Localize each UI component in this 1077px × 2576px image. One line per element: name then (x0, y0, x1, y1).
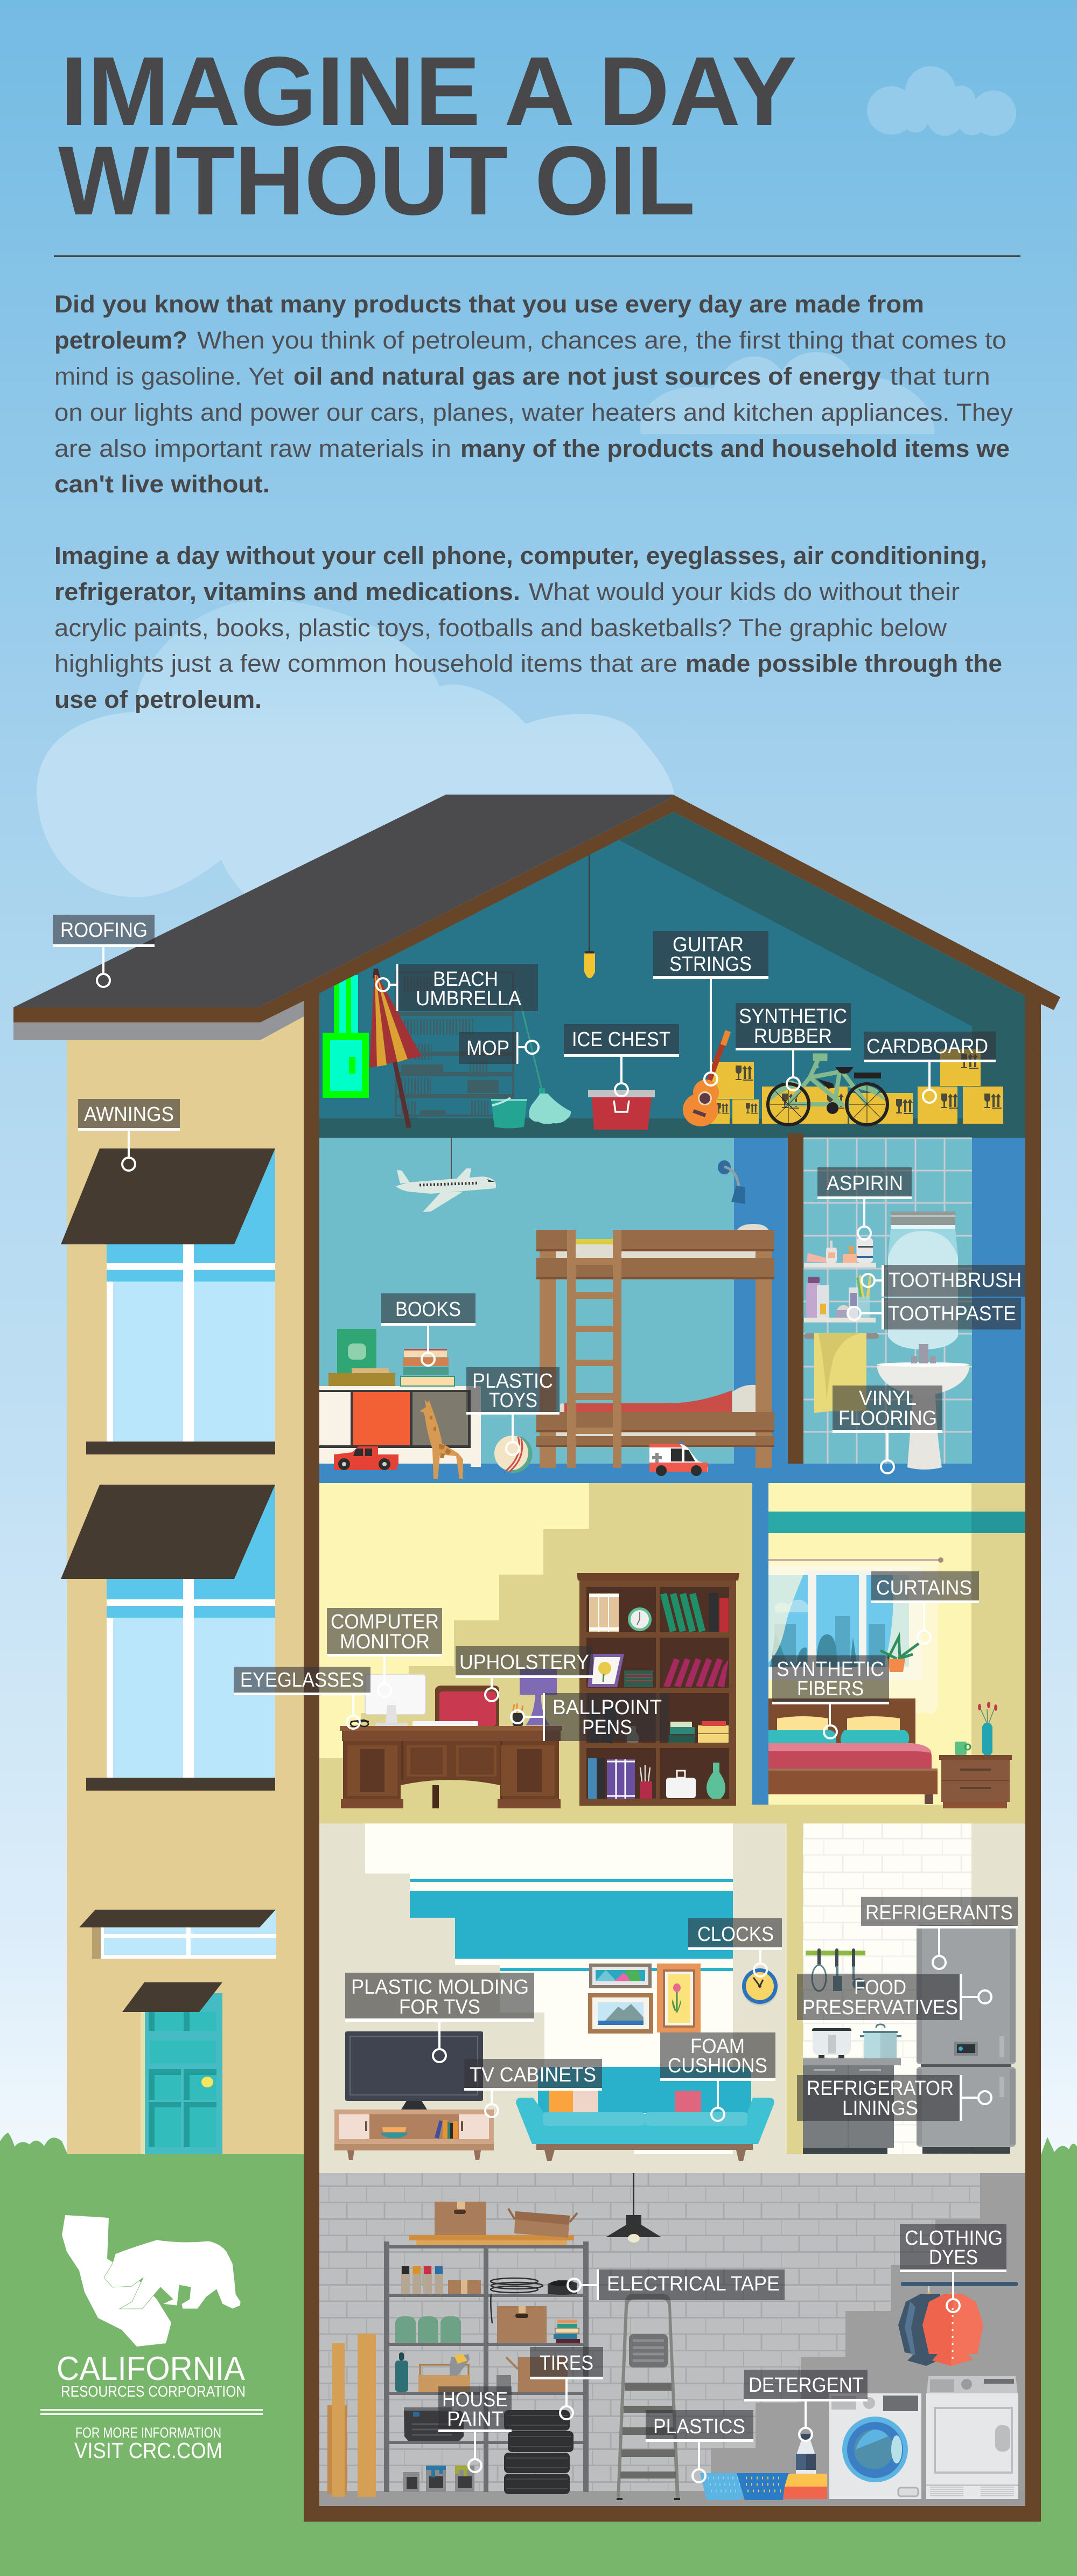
icon: cardboard boxes (710, 1049, 1003, 1124)
icon: wire coil (491, 2278, 543, 2323)
icon: stacked books and folder (328, 1329, 454, 1386)
text block: intro paragraph 1: petroleum? (54, 326, 187, 354)
panel: kitchen (787, 1823, 1025, 2173)
label: toothpaste (848, 1298, 1021, 1329)
label: synthetic rubber: SYNTHETIC (739, 1005, 847, 1028)
label: guitar strings: STRINGS (669, 953, 752, 976)
icon: beach umbrella (369, 969, 422, 1128)
label: clocks: CLOCKS (697, 1923, 774, 1946)
label: vinyl flooring: FLOORING (838, 1407, 937, 1430)
label: clothing dyes (900, 2224, 1006, 2312)
teal wall band (768, 1512, 1025, 1533)
text block: intro paragraph 2: Imagine a day without your cell phone, computer, eyeglasses, air conditioning, (54, 542, 987, 569)
label: guitar strings: GUITAR (673, 934, 744, 956)
label: eyeglasses: EYEGLASSES (240, 1669, 364, 1691)
blue wall band (410, 1879, 733, 1971)
label: eyeglasses (234, 1667, 370, 1729)
label: clothing dyes: DYES (929, 2246, 978, 2269)
text block: intro paragraph 2: highlights just a few common household items that are (54, 650, 677, 677)
title: WITHOUT OIL (58, 126, 695, 235)
transom window with awning (79, 1910, 276, 1959)
text block: intro paragraph 1: that turn (890, 363, 990, 390)
label: cardboard (864, 1032, 996, 1103)
label: foam cushions: FOAM (690, 2035, 745, 2058)
icon: paint cans (403, 2466, 474, 2492)
label: clothing dyes: CLOTHING (905, 2227, 1003, 2250)
label: house paint (438, 2386, 512, 2472)
icon: toy airplane (396, 1138, 496, 1212)
icon: dark toolbox (404, 2407, 464, 2441)
label: computer monitor (327, 1608, 442, 1697)
icon: wall lamp (718, 1160, 745, 1204)
text block: intro paragraph 2: acrylic paints, books, plastic toys, footballs and basketballs? The graphic below (54, 614, 947, 642)
icon: counter and cabinets (803, 2058, 901, 2154)
label: toothbrush (862, 1265, 1025, 1297)
label: house paint: PAINT (447, 2408, 503, 2431)
text block: intro paragraph 2 (54, 542, 1002, 713)
label: mop (459, 1032, 538, 1064)
icon: boards and boxes on top shelf (409, 2202, 577, 2245)
text block: intro paragraph 1: When you think of petroleum, chances are, the first thing that comes to (197, 326, 1006, 354)
label: plastic toys: PLASTIC (472, 1370, 553, 1393)
text block: intro paragraph 1: mind is gasoline. Yet (54, 363, 284, 390)
label: synthetic rubber (736, 1003, 851, 1090)
label: plastic molding for TVs: PLASTIC MOLDING (351, 1976, 529, 1999)
title: IMAGINE A DAY (60, 36, 797, 146)
label: electrical tape (568, 2269, 785, 2300)
label: toothpaste: TOOTHPASTE (888, 1303, 1016, 1325)
label: books (381, 1293, 475, 1366)
text block: intro paragraph 1: can't live without. (54, 470, 270, 498)
label: upholstery: UPHOLSTERY (459, 1651, 589, 1674)
bookshelf silhouette (395, 971, 514, 1117)
icon: stack of tires (504, 2410, 574, 2494)
icon: laundry baskets (700, 2473, 790, 2500)
label: TV cabinets (464, 2059, 602, 2117)
text block: intro paragraph 1: on our lights and power our cars, planes, water heaters and kitchen appliances. They (54, 399, 1013, 426)
icon: metal shelving (384, 2241, 589, 2492)
icon: picture frames (588, 1964, 701, 2034)
panel: bedroom (752, 1483, 1025, 1823)
label: ice chest (564, 1024, 679, 1096)
label: refrigerants (861, 1897, 1018, 1969)
icon: spray cans and small box (401, 2266, 481, 2294)
title (58, 36, 797, 235)
icon: toy giraffe (419, 1400, 463, 1479)
logo: California Resources Corporation (40, 2215, 263, 2463)
text block: intro paragraph 2: made possible through the (686, 650, 1002, 677)
label: detergent (744, 2370, 868, 2441)
cloud: behind text (640, 352, 934, 434)
cloud: top right (867, 66, 1016, 136)
annex wall (67, 1015, 304, 2154)
icon: hanging light bulb (584, 854, 595, 978)
icon: glass jars (395, 2316, 461, 2343)
icon: cardboard box with books (497, 2306, 580, 2343)
icon: utensil rail (806, 1948, 865, 1991)
icon: nightstand with vase and mug (939, 1702, 1012, 1808)
label: aspirin: ASPIRIN (827, 1172, 903, 1195)
icon: clothes on rail (898, 2282, 1018, 2366)
label: guitar strings (653, 931, 768, 1085)
icon: lumber planks (327, 2334, 376, 2497)
label: vinyl flooring (833, 1386, 942, 1473)
icon: mirror (888, 1212, 958, 1349)
icon: thermos, toolbox and can (395, 2352, 568, 2392)
icon: pen cup (513, 1703, 523, 1726)
lower window with awning (61, 1485, 275, 1791)
label: tires: TIRES (540, 2352, 593, 2375)
ground and grass (0, 2133, 1077, 2576)
label: refrigerator linings: LININGS (842, 2097, 918, 2120)
label: toothbrush: TOOTHBRUSH (889, 1269, 1022, 1292)
icon: television (345, 2031, 483, 2109)
icon: washing machine (829, 2393, 921, 2499)
logo: California Resources Corporation: VISIT CRC.COM (74, 2438, 222, 2463)
label: tires (530, 2347, 603, 2419)
text block: intro paragraph 2: refrigerator, vitamins and medications. (54, 578, 520, 605)
label: refrigerator linings: REFRIGERATOR (807, 2077, 954, 2100)
label: food preservatives (797, 1974, 991, 2020)
label: plastics (646, 2410, 753, 2482)
text block: intro paragraph 1: are also important raw materials in (54, 435, 451, 462)
white stepped wall (365, 1823, 733, 2154)
label: roofing: ROOFING (60, 919, 148, 942)
icon: ice chest (588, 1090, 655, 1130)
label: refrigerator linings (797, 2075, 991, 2121)
label: curtains: CURTAINS (876, 1577, 972, 1599)
label: plastic molding for TVs: FOR TVS (399, 1996, 480, 2018)
icon: bookcase (577, 1573, 739, 1806)
panel: kids bedroom (319, 1138, 1025, 1483)
icon: neon electrical box (323, 975, 369, 1098)
icon: step ladder (617, 2294, 680, 2500)
logo: California Resources Corporation: CALIFORNIA (57, 2350, 246, 2387)
icon: computer monitor (365, 1674, 478, 1726)
icon: dryer (926, 2376, 1018, 2499)
label: plastic molding for TVs (345, 1973, 534, 2062)
label: awnings: AWNINGS (84, 1103, 174, 1126)
label: electrical tape: ELECTRICAL TAPE (607, 2273, 780, 2295)
label: roofing (53, 915, 155, 987)
icon: refrigerator (917, 1925, 1016, 2154)
label: awnings (78, 1099, 180, 1171)
icon: hanging lamp (606, 2173, 661, 2243)
icon: desk (340, 1726, 562, 1808)
panel: garage (319, 2173, 1025, 2506)
panel: living room (319, 1823, 787, 2173)
icon: detergent bottle (796, 2434, 816, 2474)
icon: wall clock (742, 1968, 778, 2006)
label: house paint: HOUSE (442, 2389, 508, 2411)
label: beach umbrella: BEACH (433, 968, 498, 991)
label: foam cushions: CUSHIONS (668, 2055, 767, 2077)
icon: bathroom shelves and toiletries (804, 1238, 876, 1322)
roof (13, 795, 1060, 1040)
text block: intro paragraph 1: oil and natural gas are not just sources of energy (293, 363, 881, 390)
label: plastic toys: TOYS (489, 1389, 537, 1412)
icon: rice cooker (812, 2028, 851, 2058)
label: vinyl flooring: VINYL (859, 1387, 917, 1410)
icon: eyeglasses (351, 1720, 369, 1726)
label: computer monitor: MONITOR (340, 1631, 430, 1653)
label: computer monitor: COMPUTER (331, 1611, 439, 1633)
label: food preservatives: FOOD (854, 1976, 906, 1999)
icon: bucket (491, 1098, 527, 1128)
label: ballpoint pens: BALLPOINT (553, 1696, 662, 1719)
text block: intro paragraph 2: What would your kids do without their (529, 578, 960, 605)
label: ballpoint pens: PENS (582, 1716, 632, 1739)
text block: intro paragraph 1: Did you know that many products that you use every day are made from (54, 290, 924, 318)
logo: California Resources Corporation: FOR MORE INFORMATION (75, 2425, 221, 2441)
panel: bathroom (803, 1138, 1025, 1470)
icon: bunk bed (536, 1224, 774, 1468)
logo: California Resources Corporation: RESOURCES CORPORATION (61, 2383, 246, 2400)
icon: toy storage cabinet (319, 1386, 481, 1467)
icon: window with curtains (768, 1557, 943, 1714)
label: upholstery (456, 1646, 593, 1701)
icon: toy truck (334, 1446, 398, 1470)
label: synthetic rubber: RUBBER (754, 1025, 832, 1048)
label: synthetic fibers (772, 1655, 889, 1738)
icon: chair (435, 1686, 499, 1726)
icon: table lamp (520, 1669, 557, 1725)
icon: TV cabinet (334, 2109, 494, 2160)
text block: intro paragraph 2: use of petroleum. (54, 686, 262, 713)
label: mop: MOP (466, 1037, 509, 1060)
cloud: large behind roof (37, 599, 674, 916)
label: curtains (871, 1571, 979, 1644)
icon: sink (877, 1344, 970, 1470)
label: aspirin (817, 1167, 912, 1240)
label: foam cushions (660, 2032, 775, 2121)
label: ballpoint pens (511, 1693, 669, 1741)
label: books: BOOKS (395, 1298, 461, 1321)
walls: house frame (304, 993, 1041, 2522)
label: plastics: PLASTICS (653, 2415, 745, 2438)
icon: mop (517, 988, 571, 1124)
text block: intro paragraph 1: many of the products and household items we (460, 435, 1010, 462)
icon: towel and bar (804, 1333, 879, 1413)
icon: sofa (516, 2067, 774, 2161)
text block: intro paragraph 1 (54, 290, 1013, 498)
icon: electrical tape (548, 2280, 577, 2295)
icon: toy ambulance (649, 1442, 708, 1476)
label: refrigerants: REFRIGERANTS (865, 1902, 1013, 1924)
label: beach umbrella: UMBRELLA (416, 987, 522, 1010)
icon: cooking pot (860, 2024, 901, 2058)
label: clocks (688, 1918, 782, 1976)
upper window with awning (61, 1148, 275, 1454)
icon: bicycle (767, 1055, 890, 1125)
label: beach umbrella (376, 964, 538, 1011)
label: food preservatives: PRESERVATIVES (802, 1996, 958, 2019)
icon: bed (768, 1698, 938, 1804)
label: plastic toys (466, 1367, 560, 1455)
label: synthetic fibers: SYNTHETIC (777, 1658, 884, 1681)
icon: guitar (683, 1031, 728, 1126)
label: synthetic fibers: FIBERS (797, 1677, 864, 1700)
label: TV cabinets: TV CABINETS (470, 2064, 596, 2086)
icon: toy ball (494, 1436, 533, 1473)
panel: office (319, 1483, 752, 1823)
label: cardboard: CARDBOARD (866, 1035, 988, 1058)
front door (122, 1982, 222, 2154)
label: ice chest: ICE CHEST (572, 1028, 670, 1051)
icon: folded towels (783, 2474, 827, 2499)
label: detergent: DETERGENT (749, 2374, 864, 2397)
panel: attic (319, 812, 1025, 1138)
